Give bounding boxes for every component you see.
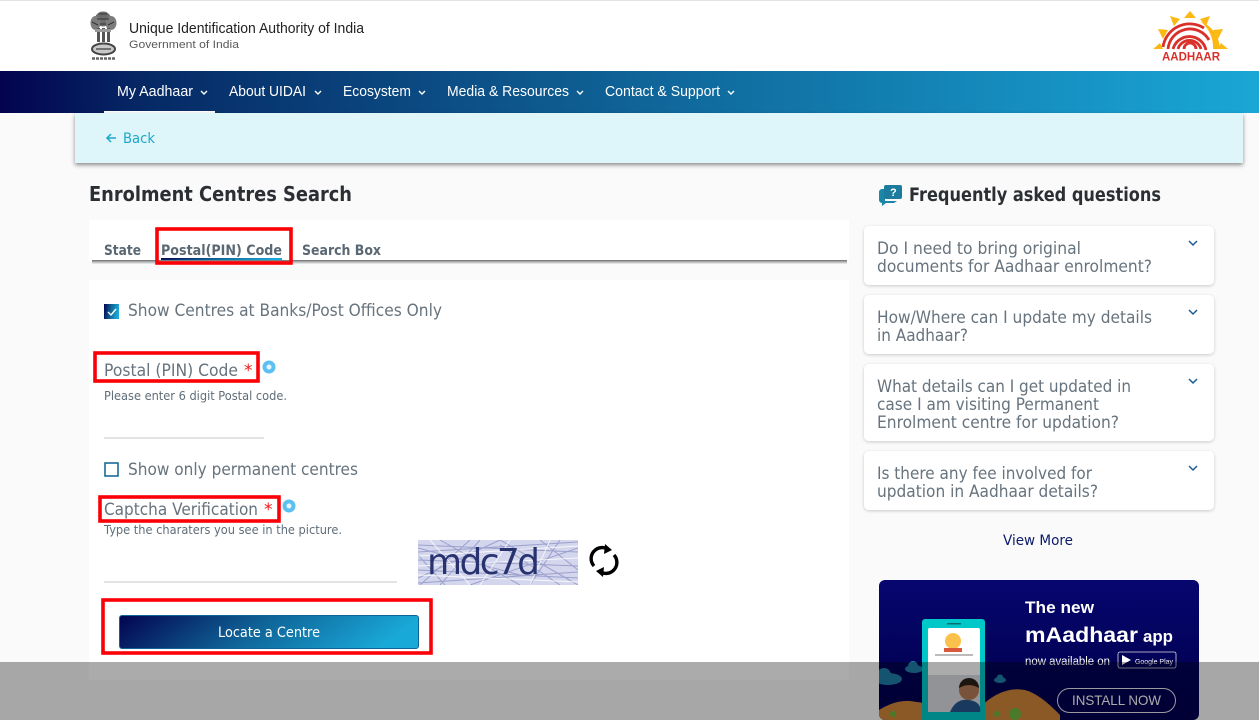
tab labels: Postal(PIN) Code (161, 243, 282, 259)
captcha required mark: * (264, 500, 272, 520)
nav items: Ecosystem (343, 84, 411, 100)
faq card 4: Is there any fee involved for (877, 464, 1092, 484)
icon: captcha info (282, 500, 296, 512)
faq card 2: How/Where can I update my details (877, 308, 1152, 328)
organisation name: Unique Identification Authority of India (129, 21, 365, 37)
icon: aadhaar logo: AADHAAR (1162, 52, 1221, 64)
faq card 3: What details can I get updated in (877, 377, 1131, 397)
banner text: now available on (1025, 656, 1110, 668)
illustration: bushes (890, 708, 1021, 720)
navigation bar (0, 71, 1259, 113)
government line: Government of India (129, 39, 240, 51)
icon: national emblem (90, 12, 116, 58)
illustration: hills (879, 689, 1060, 720)
captcha image (418, 540, 578, 585)
icon: aadhaar logo (1153, 11, 1228, 64)
back bar (75, 113, 1243, 163)
back link: Back (123, 131, 156, 147)
pin code label: Postal (PIN) Code (104, 361, 238, 381)
header bar (0, 0, 1259, 71)
nav chevrons (201, 91, 734, 94)
faq card 3 (864, 364, 1214, 441)
banner text: The new (1025, 598, 1095, 617)
tab labels: State (104, 243, 141, 259)
checked checkbox (104, 304, 119, 319)
faq card 3: Enrolment centre for updation? (877, 413, 1119, 433)
nav items: Media & Resources (447, 84, 569, 100)
panel: search form (104, 303, 619, 649)
illustration: phone (922, 619, 985, 720)
checkbox label: Show Centres at Banks/Post Offices Only (128, 301, 442, 321)
icon: faq speech bubbles: ? (890, 187, 897, 199)
nav items: Contact & Support (605, 84, 720, 100)
active tab underline (104, 111, 215, 113)
tab labels: Search Box (302, 243, 382, 259)
faq card 3: case I am visiting Permanent (877, 395, 1099, 415)
faq heading: Frequently asked questions (909, 185, 1161, 206)
nav items: About UIDAI (229, 84, 306, 100)
permanent centres label: Show only permanent centres (128, 460, 358, 480)
pin input line (104, 437, 264, 439)
faq card 2: in Aadhaar? (877, 326, 968, 346)
pin hint: Please enter 6 digit Postal code. (104, 389, 287, 403)
required mark: * (244, 361, 252, 381)
icon: faq speech bubbles (879, 185, 902, 206)
google play badge: Google Play (1135, 659, 1173, 666)
google play badge (1118, 652, 1176, 668)
faq card 1: documents for Aadhaar enrolment? (877, 257, 1152, 277)
install now button (1058, 688, 1176, 712)
faq card 1: Do I need to bring original (877, 239, 1081, 259)
faq card 4 (864, 451, 1214, 510)
highlight boxes (95, 229, 431, 653)
banner text: app (1143, 627, 1173, 646)
icon: refresh captcha (591, 544, 617, 577)
captcha hint: Type the charaters you see in the picture. (103, 523, 342, 537)
unchecked checkbox (105, 463, 118, 476)
page heading: Enrolment Centres Search (89, 182, 352, 206)
locate button: Locate a Centre (218, 625, 320, 641)
bottom grey overlay (0, 662, 1259, 720)
mAadhaar banner (874, 580, 1199, 720)
icon: back arrow (107, 134, 116, 142)
nav items (117, 84, 720, 100)
faq card 4: updation in Aadhaar details? (877, 482, 1098, 502)
banner text (1025, 598, 1173, 668)
locate button (120, 616, 418, 648)
illustration: clouds (874, 661, 1006, 685)
captcha image: mdc7d (427, 542, 540, 583)
icon: pin info (262, 360, 276, 374)
faq card 2 (864, 295, 1214, 354)
nav items: My Aadhaar (117, 84, 193, 100)
tab labels (104, 243, 382, 259)
view more link: View More (1003, 533, 1073, 549)
panel: search tabs (89, 220, 849, 264)
banner text: mAadhaar (1025, 624, 1138, 647)
install now button: INSTALL NOW (1072, 692, 1162, 708)
captcha input line (104, 581, 397, 583)
captcha label: Captcha Verification (104, 500, 258, 520)
active tab underline (161, 258, 282, 260)
faq card 1 (864, 226, 1214, 285)
